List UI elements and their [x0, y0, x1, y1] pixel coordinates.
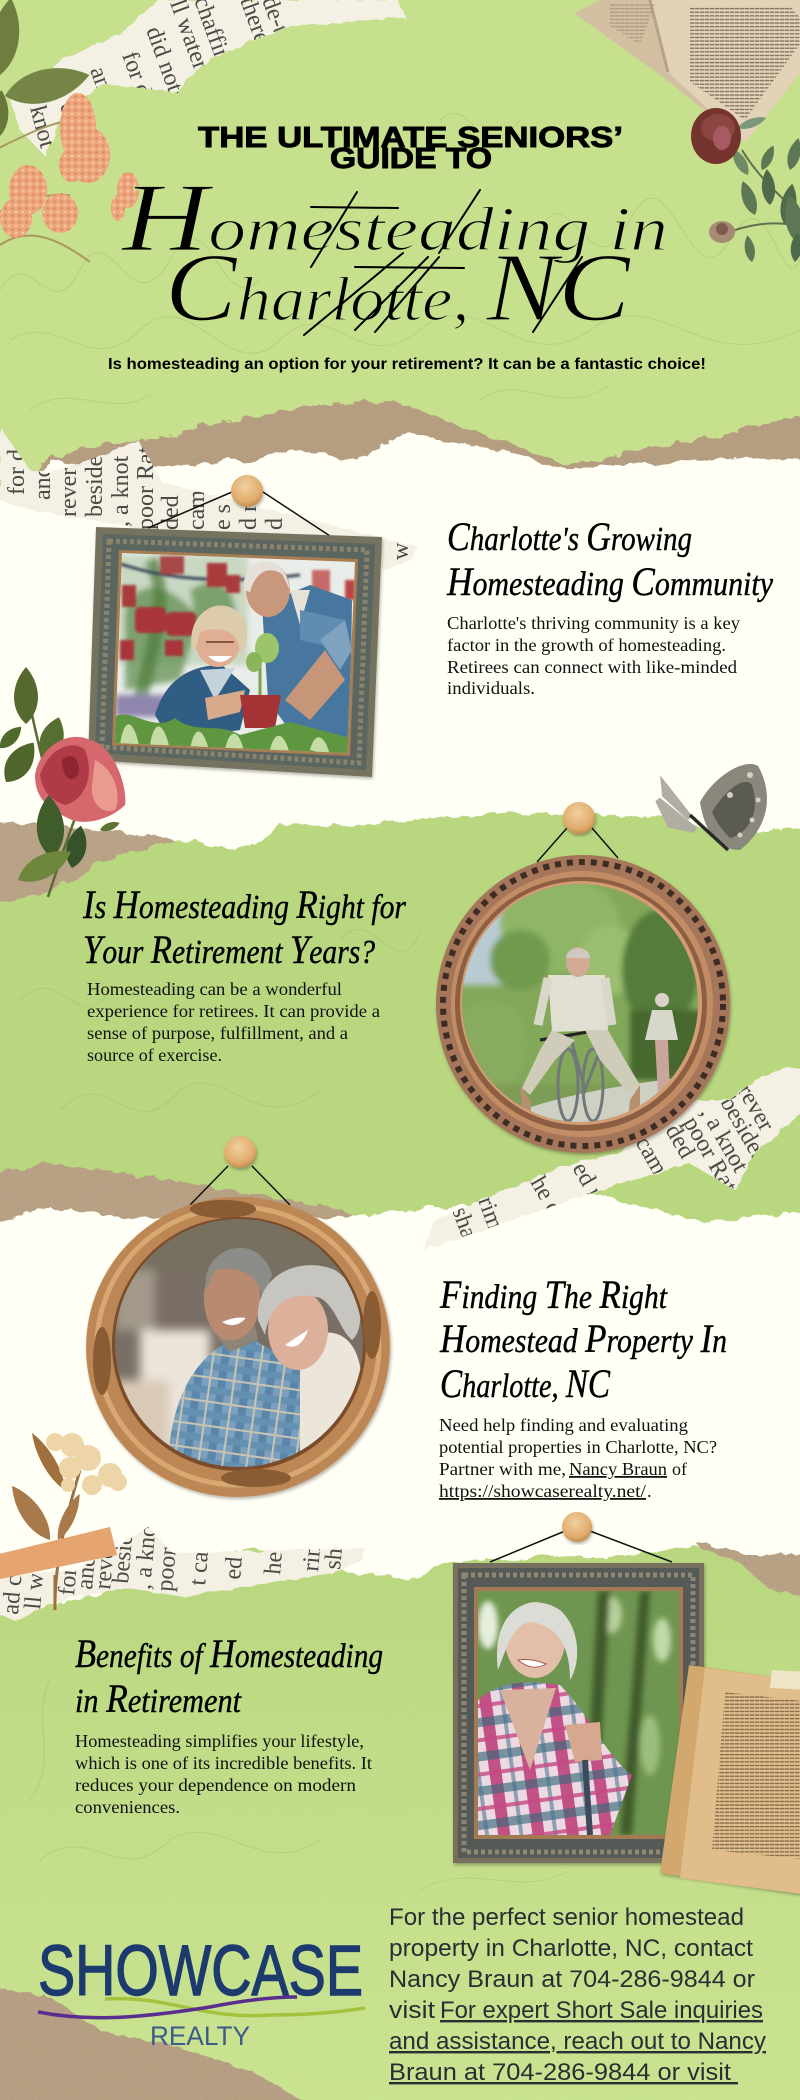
- panel: third section text: Finding The Right: [439, 1272, 668, 1317]
- torn newspaper strip: fourth section: poor Ra: [152, 1514, 185, 1593]
- title block: H omesteading in: [120, 164, 668, 272]
- photo: woman with walking pole: [478, 1591, 679, 1835]
- panel: fourth section text: reduces your dependence on modern: [75, 1775, 356, 1795]
- torn newspaper strip: top left: did nothi: [140, 23, 194, 113]
- green paper band: second section: [0, 813, 800, 1250]
- torn newspaper strip: behind first frame: e s: [210, 504, 236, 530]
- panel: fourth section text: [75, 1631, 383, 1817]
- torn newspaper strip: lower right of round frame: he d: [525, 1172, 568, 1220]
- panel: fourth section text: Benefits of Homesteading: [75, 1631, 383, 1676]
- torn newspaper strip: top left: [10, 0, 405, 157]
- torn newspaper strip: fourth section: ll wa: [20, 1561, 50, 1611]
- kraft torn band: left of second section: [0, 822, 180, 910]
- call to action text: visit: [389, 1997, 435, 2024]
- torn newspaper strip: behind first frame: [0, 427, 418, 570]
- man: [548, 975, 608, 1032]
- photo: couple: [110, 1215, 370, 1475]
- panel: third section text: https://showcaserealty.net/: [439, 1481, 646, 1501]
- icon: dried flower with orange tape: [0, 1430, 127, 1610]
- logo: Showcase Realty: SHOWCASE: [38, 1932, 363, 2011]
- torn newspaper strip: behind first frame: ded: [158, 495, 184, 530]
- panel: third section text: potential properties in Charlotte, NC?: [439, 1437, 717, 1457]
- panel: rectangular framed photo, senior woman: [453, 1512, 704, 1863]
- bicycle: [558, 1035, 603, 1121]
- torn newspaper strip: fourth section: he d: [260, 1533, 290, 1576]
- panel: second section text: Is Homesteading Right for: [82, 882, 407, 927]
- panel: first section text: Retirees can connect with like-minded: [447, 657, 737, 677]
- torn newspaper strip: lower right of round frame: ed r: [567, 1158, 608, 1203]
- panel: third section text: Partner with me,: [439, 1459, 566, 1479]
- panel: first section text: factor in the growth of homesteading.: [447, 635, 726, 655]
- torn newspaper strip: behind first frame: w: [388, 542, 414, 560]
- white paper band: third section: [0, 1193, 800, 1640]
- panel: third section text: [439, 1272, 727, 1501]
- torn newspaper strip: top left: and: [84, 63, 121, 105]
- panel: third section text: Homestead Property In: [439, 1316, 727, 1361]
- white paper band: first section: [0, 433, 800, 910]
- torn newspaper strip: lower right of round frame: sha: [446, 1203, 482, 1242]
- panel: fourth section text: which is one of its incredible benefits. It: [75, 1753, 372, 1773]
- call to action text: For the perfect senior homestead: [389, 1904, 744, 1931]
- panel: second section text: Homesteading can be a wonderful: [87, 979, 342, 999]
- call to action text: property in Charlotte, NC, contact: [389, 1935, 753, 1962]
- torn newspaper strip: fourth section: [0, 1527, 366, 1621]
- torn newspaper strip: lower right of round frame: poor Rat: [678, 1112, 742, 1197]
- panel: first section text: Charlotte's thriving community is a key: [447, 613, 740, 633]
- torn newspaper strip: lower right of round frame: , a knot: [695, 1102, 753, 1177]
- old book page: lower right: [660, 1665, 800, 1895]
- panel: first section framed photo: [88, 475, 382, 777]
- torn newspaper strip: fourth section: sha: [320, 1536, 349, 1571]
- panel: third section text: Need help finding and evaluating: [439, 1415, 688, 1435]
- photo: cyclists in park: [462, 884, 698, 1122]
- tagline: Is homesteading an option for your retirement? It can be a fantastic choice!: [108, 356, 706, 373]
- open book: top right: [574, 0, 800, 143]
- title block: [120, 122, 668, 342]
- torn newspaper strip: behind first frame: d: [262, 518, 288, 530]
- torn newspaper strip: top left: knot: [24, 103, 60, 151]
- torn newspaper strip: fourth section: besides: [108, 1512, 140, 1585]
- panel: first section text: Homesteading Community: [446, 559, 774, 604]
- panel: round framed photo, man cycling: [436, 802, 730, 1153]
- torn newspaper strip: behind first frame: d r: [236, 504, 262, 530]
- call to action text: Braun at 704-286-9844 or visit: [389, 2059, 738, 2086]
- panel: second section text: [82, 882, 407, 1065]
- potted plant: [240, 695, 281, 728]
- torn newspaper strip: lower right of round frame: cam: [630, 1132, 672, 1180]
- icon: moth butterfly: [658, 764, 767, 850]
- call to action text: [389, 1904, 766, 2086]
- man: [262, 585, 352, 745]
- call to action text: Nancy Braun at 704-286-9844 or: [389, 1966, 755, 1993]
- torn newspaper strip: lower right of round frame: ded: [660, 1120, 700, 1163]
- torn newspaper strip: lower right of round frame: besides: [715, 1092, 773, 1166]
- panel: third section text: .: [647, 1481, 652, 1501]
- torn newspaper strip: top left: for d: [116, 48, 157, 100]
- green paper band: fourth section and footer: [0, 1545, 800, 2100]
- small cyclist: [645, 1010, 678, 1040]
- torn newspaper strip: behind first frame: for d: [4, 449, 30, 495]
- icon: red rose with foliage, top right: [691, 108, 800, 263]
- panel: first section text: [446, 514, 774, 698]
- title block: GUIDE TO: [330, 143, 492, 175]
- call to action text: For expert Short Sale inquiries: [440, 1997, 763, 2024]
- title block: Charlotte, NC: [165, 234, 632, 342]
- torn newspaper strip: fourth section: rever: [90, 1539, 120, 1591]
- torn newspaper strip: fourth section: for: [54, 1566, 82, 1597]
- kraft torn band: top: [40, 400, 800, 490]
- torn newspaper strip: fourth section: rim: [298, 1537, 327, 1573]
- panel: fourth section text: in Retirement: [75, 1676, 242, 1721]
- panel: second section text: source of exercise.: [87, 1045, 222, 1065]
- woman: [155, 666, 250, 732]
- panel: oval framed photo, smiling couple: [86, 1136, 393, 1501]
- torn newspaper strip: fourth section: and: [72, 1554, 101, 1591]
- panel: first section text: Charlotte's Growing: [447, 514, 692, 559]
- kraft torn band: above third section: [0, 1163, 350, 1245]
- logo: Showcase Realty: REALTY: [150, 2021, 250, 2051]
- kraft torn corner: footer: [0, 1988, 310, 2100]
- kraft torn band: right of fourth section: [694, 1541, 800, 1610]
- panel: second section text: experience for retirees. It can provide a: [87, 1001, 380, 1021]
- panel: third section text: Nancy Braun: [569, 1459, 667, 1479]
- torn newspaper strip: lower right of round frame: rever: [732, 1080, 779, 1136]
- torn newspaper strip: behind first frame: besides: [82, 446, 108, 517]
- icon: botanical leaves and coral flowers: [0, 0, 139, 262]
- panel: second section text: Your Retirement Years?: [83, 927, 375, 972]
- call to action text: and assistance, reach out to Nancy: [389, 2028, 766, 2055]
- torn newspaper strip: fourth section: ed r: [220, 1542, 249, 1581]
- torn newspaper strip: fourth section: t cam: [185, 1531, 216, 1587]
- torn newspaper strip: lower right of round frame: rim: [472, 1193, 508, 1234]
- torn newspaper strip: behind first frame: , a knot: [108, 455, 134, 527]
- torn newspaper strip: fourth section: , a knot: [130, 1517, 162, 1591]
- icon: pink rose with leaves: [0, 667, 125, 897]
- torn newspaper strip: behind first frame: and: [30, 465, 56, 500]
- torn newspaper strip: behind first frame: rever: [56, 468, 82, 517]
- panel: first section text: individuals.: [447, 678, 535, 698]
- torn newspaper strip: behind first frame: cam: [184, 490, 210, 530]
- panel: fourth section text: conveniences.: [75, 1797, 180, 1817]
- torn newspaper strip: behind first frame: poor Rat: [133, 446, 159, 530]
- foliage: [115, 714, 348, 753]
- panel: third section text: Charlotte, NC: [440, 1361, 611, 1406]
- panel: third section text: of: [672, 1459, 687, 1479]
- photo: couple gardening in greenhouse: [110, 550, 360, 760]
- torn newspaper strip: top left: der: [54, 100, 87, 136]
- frame ornaments: [93, 1200, 381, 1487]
- logo: Showcase Realty: [38, 1932, 365, 2051]
- panel: second section text: sense of purpose, fulfillment, and a: [87, 1023, 348, 1043]
- torn newspaper strip: lower right of round frame: [424, 1067, 800, 1250]
- panel: fourth section text: Homesteading simplifies your lifestyle,: [75, 1731, 364, 1751]
- title block: THE ULTIMATE SENIORS’: [198, 122, 623, 154]
